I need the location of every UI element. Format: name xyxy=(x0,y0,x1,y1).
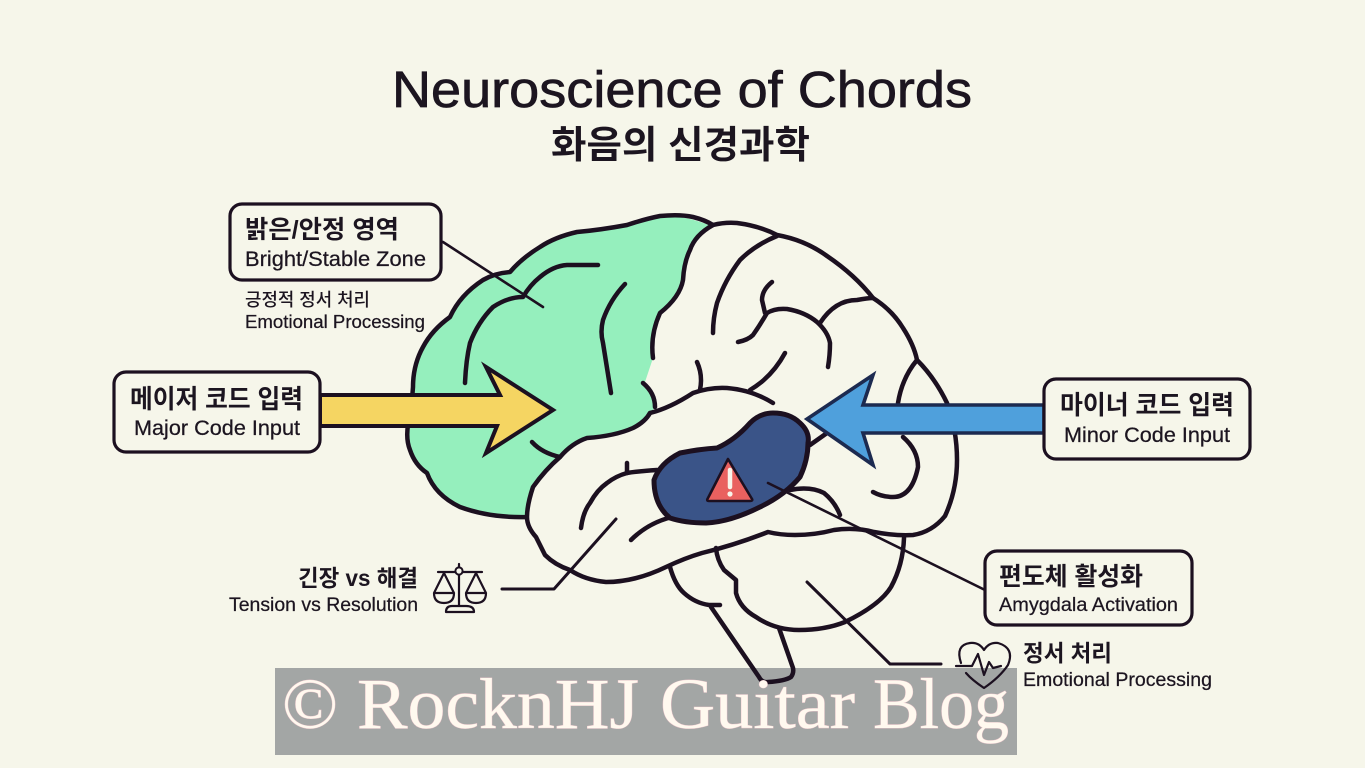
text: tension vs resolution: Tension vs Resolution xyxy=(229,594,418,616)
text: emotional processing: Emotional Processing xyxy=(1023,669,1212,691)
label: minor code input: Minor Code Input xyxy=(1064,424,1230,447)
label: major code input: Major Code Input xyxy=(134,417,300,440)
label: bright stable zone: 밝은/안정 영역 xyxy=(245,216,399,244)
label: bright stable zone xyxy=(230,204,441,280)
watermark text xyxy=(282,664,1009,744)
watermark text: © xyxy=(282,664,338,744)
icon: balance scale xyxy=(434,564,486,612)
title: Neuroscience of Chords xyxy=(392,61,972,118)
green zone gyrus lines xyxy=(465,265,655,457)
watermark text: Guitar xyxy=(660,664,855,744)
text: positive emotional processing: Emotional Processing xyxy=(245,311,425,332)
label: bright stable zone: Bright/Stable Zone xyxy=(245,247,426,271)
label: amygdala activation: 편도체 활성화 xyxy=(999,563,1143,591)
leader line: amygdala xyxy=(768,483,985,590)
label: major code input: 메이저 코드 입력 xyxy=(130,384,303,414)
green zone right boundary xyxy=(652,225,713,358)
icon: warning triangle xyxy=(707,459,752,501)
icon: heart with pulse xyxy=(956,643,1010,688)
arrow: minor input blue xyxy=(807,375,1044,465)
text: tension vs resolution: 긴장 vs 해결 xyxy=(298,565,418,591)
text: positive emotional processing: 긍정적 정서 처리 xyxy=(245,290,370,310)
green bright zone xyxy=(407,216,712,518)
label: amygdala activation xyxy=(985,551,1192,625)
brain outer contour xyxy=(407,215,957,582)
text: positive emotional processing xyxy=(245,290,425,332)
arrow: major input yellow xyxy=(320,367,553,453)
text: tension vs resolution xyxy=(229,565,418,616)
brain diagram xyxy=(407,215,957,682)
title xyxy=(392,61,972,167)
text: emotional processing xyxy=(1023,640,1212,691)
leader line: tension xyxy=(502,519,616,589)
label: major code input xyxy=(114,372,320,452)
temporal lobe lines xyxy=(581,463,840,540)
watermark text: Blog xyxy=(873,664,1009,744)
right lobe sulci xyxy=(650,236,918,497)
label: minor code input: 마이너 코드 입력 xyxy=(1060,390,1234,420)
leader line: emotional processing xyxy=(807,582,941,664)
label: amygdala activation: Amygdala Activation xyxy=(999,594,1178,616)
cerebellum and brain stem xyxy=(670,538,904,682)
watermark text: RocknHJ xyxy=(357,664,639,744)
title: 화음의 신경과학 xyxy=(551,125,810,167)
text: emotional processing: 정서 처리 xyxy=(1023,640,1112,666)
leader line: bright zone xyxy=(443,242,543,307)
label: minor code input xyxy=(1044,379,1250,459)
amygdala xyxy=(654,413,808,523)
watermark background band xyxy=(275,668,1017,755)
